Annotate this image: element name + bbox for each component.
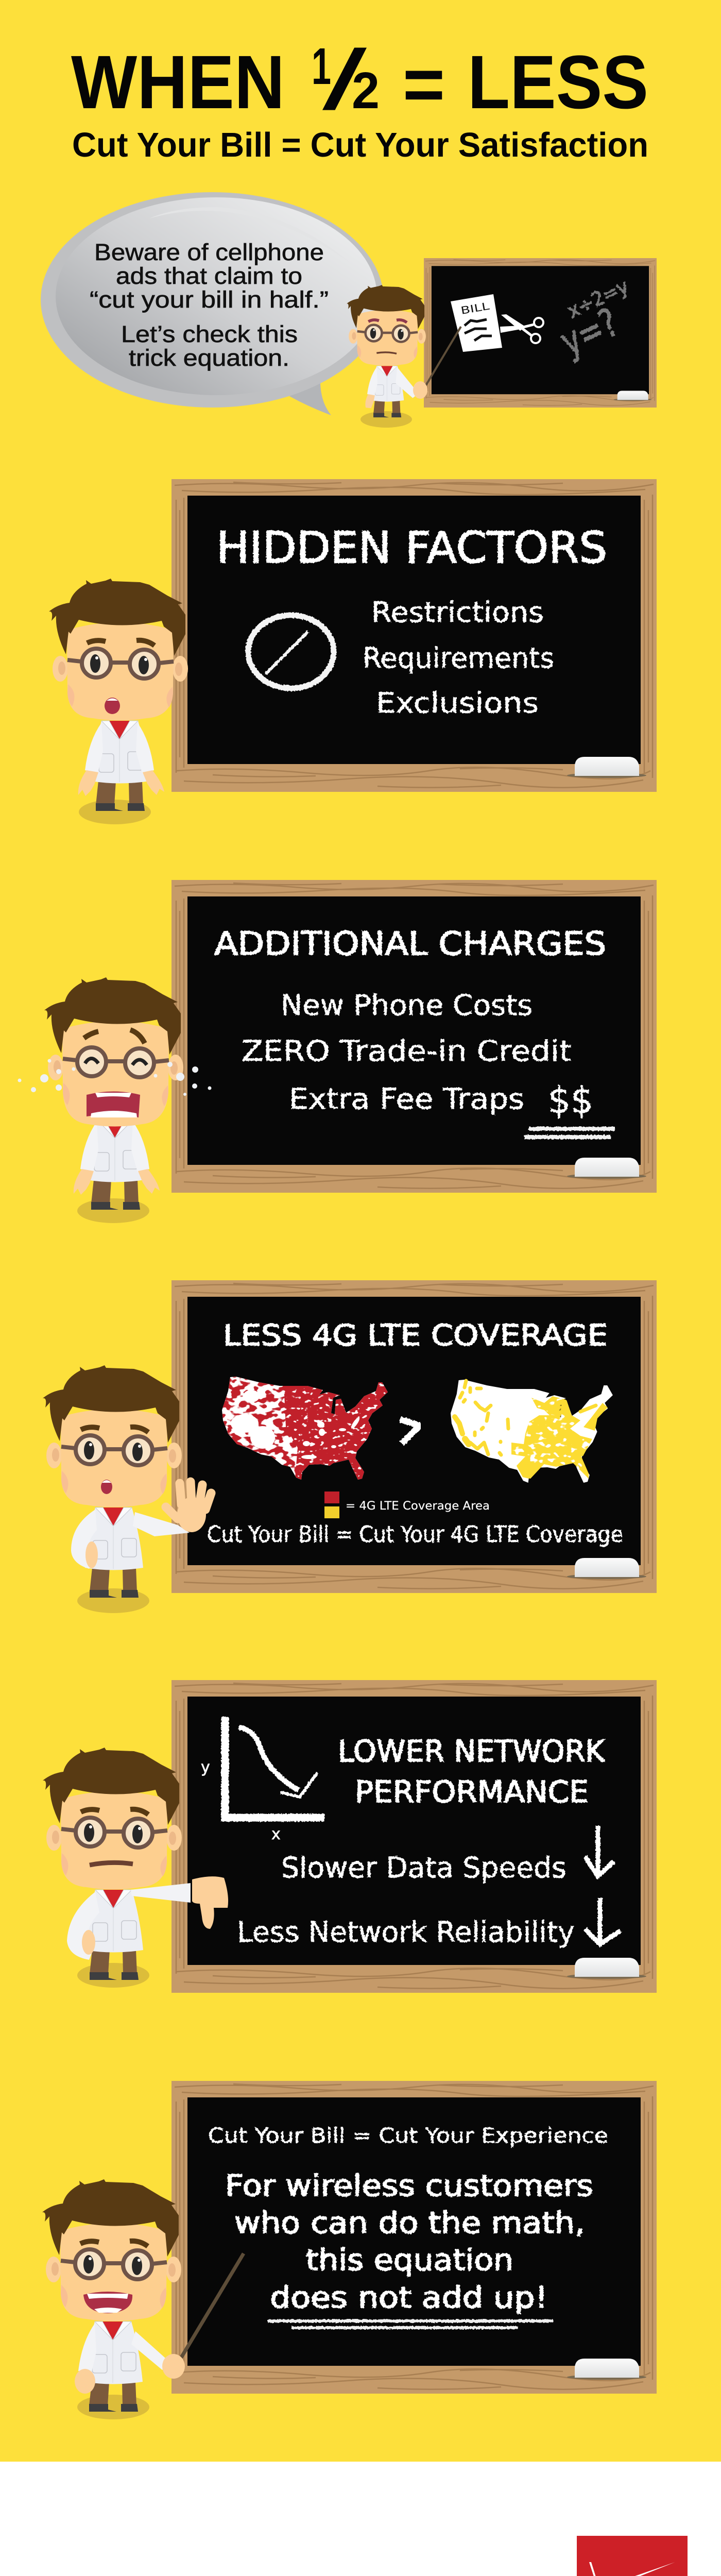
logo: verizon bbox=[577, 2536, 688, 2576]
arrows: down bbox=[585, 1826, 621, 1944]
heading bbox=[338, 1734, 606, 1809]
bubble text: Beware of cellphone bbox=[94, 239, 324, 265]
map: yellow coverage bbox=[451, 1380, 613, 1483]
legend bbox=[324, 1492, 490, 1518]
coverage caption: Cut Your Bill = Cut Your 4G LTE Coverage bbox=[207, 1521, 623, 1548]
conclusion text: does not add up! bbox=[270, 2281, 548, 2315]
list of charges: $$ bbox=[548, 1079, 593, 1122]
heading: LOWER NETWORK bbox=[338, 1734, 606, 1769]
heading: LESS 4G LTE COVERAGE bbox=[223, 1319, 608, 1352]
icon: bill on paper bbox=[451, 294, 502, 352]
character: surprised bbox=[49, 579, 188, 824]
heading: HIDDEN FACTORS bbox=[216, 522, 607, 573]
conclusion text: For wireless customers bbox=[225, 2169, 593, 2203]
title: LESS bbox=[468, 40, 648, 125]
title bbox=[71, 32, 648, 127]
conclusion text: this equation bbox=[306, 2243, 513, 2277]
conclusion text: who can do the math, bbox=[234, 2206, 585, 2240]
character: raised hand bbox=[43, 1365, 211, 1613]
character: shouting with pointer bbox=[42, 2179, 244, 2419]
character: presenter with pointer bbox=[347, 285, 461, 428]
icon: scissors bbox=[500, 314, 543, 343]
title: / bbox=[322, 32, 367, 127]
heading: ADDITIONAL CHARGES bbox=[214, 925, 606, 962]
list of charges: Extra Fee Traps bbox=[289, 1082, 524, 1115]
list with down arrows: Less Network Reliability bbox=[237, 1916, 575, 1948]
panel: conclusion bbox=[171, 2081, 657, 2394]
bubble text: “cut your bill in half.” bbox=[90, 286, 329, 313]
line graph bbox=[225, 1717, 324, 1818]
list of hidden factors: Exclusions bbox=[376, 687, 539, 719]
character: crying bbox=[18, 977, 211, 1223]
panel: hidden factors bbox=[171, 479, 657, 792]
legend: = 4G LTE Coverage Area bbox=[346, 1500, 490, 1513]
chalk equations: y=? bbox=[554, 299, 625, 365]
greater-than sign bbox=[400, 1419, 420, 1444]
title: WHEN bbox=[71, 40, 285, 125]
bubble text bbox=[90, 239, 329, 371]
axis labels: x bbox=[271, 1825, 281, 1843]
list of hidden factors: Requirements bbox=[363, 642, 554, 674]
axis labels: y bbox=[201, 1758, 210, 1776]
list with down arrows: Slower Data Speeds bbox=[281, 1851, 566, 1884]
list of hidden factors bbox=[363, 596, 554, 719]
panel: less 4G LTE coverage bbox=[171, 1280, 657, 1593]
white footer band bbox=[0, 2462, 721, 2576]
list of charges bbox=[242, 989, 593, 1122]
title: = bbox=[403, 42, 445, 127]
intro chalkboard bbox=[424, 258, 657, 408]
chalk equations: x÷2=y bbox=[564, 275, 632, 323]
icon: prohibited sign bbox=[248, 615, 334, 688]
heading: PERFORMANCE bbox=[355, 1774, 589, 1809]
conclusion text bbox=[225, 2169, 593, 2315]
speech bubble bbox=[41, 192, 384, 415]
panel: additional charges bbox=[171, 880, 657, 1193]
panel: lower network performance bbox=[171, 1680, 657, 1993]
map: red coverage bbox=[222, 1377, 388, 1480]
bubble text: trick equation. bbox=[129, 345, 289, 371]
subtitle: Cut Your Bill = Cut Your Satisfaction bbox=[72, 126, 648, 164]
list with down arrows bbox=[237, 1851, 575, 1948]
tears bbox=[18, 1059, 211, 1096]
double underline bbox=[524, 1129, 615, 1137]
check mark bbox=[589, 2562, 675, 2576]
character: thumbs down bbox=[43, 1748, 228, 1988]
icon: bill on paper: BILL bbox=[460, 299, 491, 317]
list of hidden factors: Restrictions bbox=[371, 596, 544, 629]
axis labels bbox=[201, 1758, 281, 1843]
list of charges: ZERO Trade-in Credit bbox=[242, 1035, 572, 1067]
bubble text: Let’s check this bbox=[121, 321, 298, 347]
title: 2 bbox=[352, 62, 380, 120]
caption: Cut Your Bill = Cut Your Experience bbox=[208, 2124, 608, 2148]
list of charges: New Phone Costs bbox=[281, 989, 533, 1022]
double underline bbox=[268, 2321, 553, 2328]
bubble text: ads that claim to bbox=[116, 263, 302, 289]
title: 1 bbox=[312, 38, 331, 95]
